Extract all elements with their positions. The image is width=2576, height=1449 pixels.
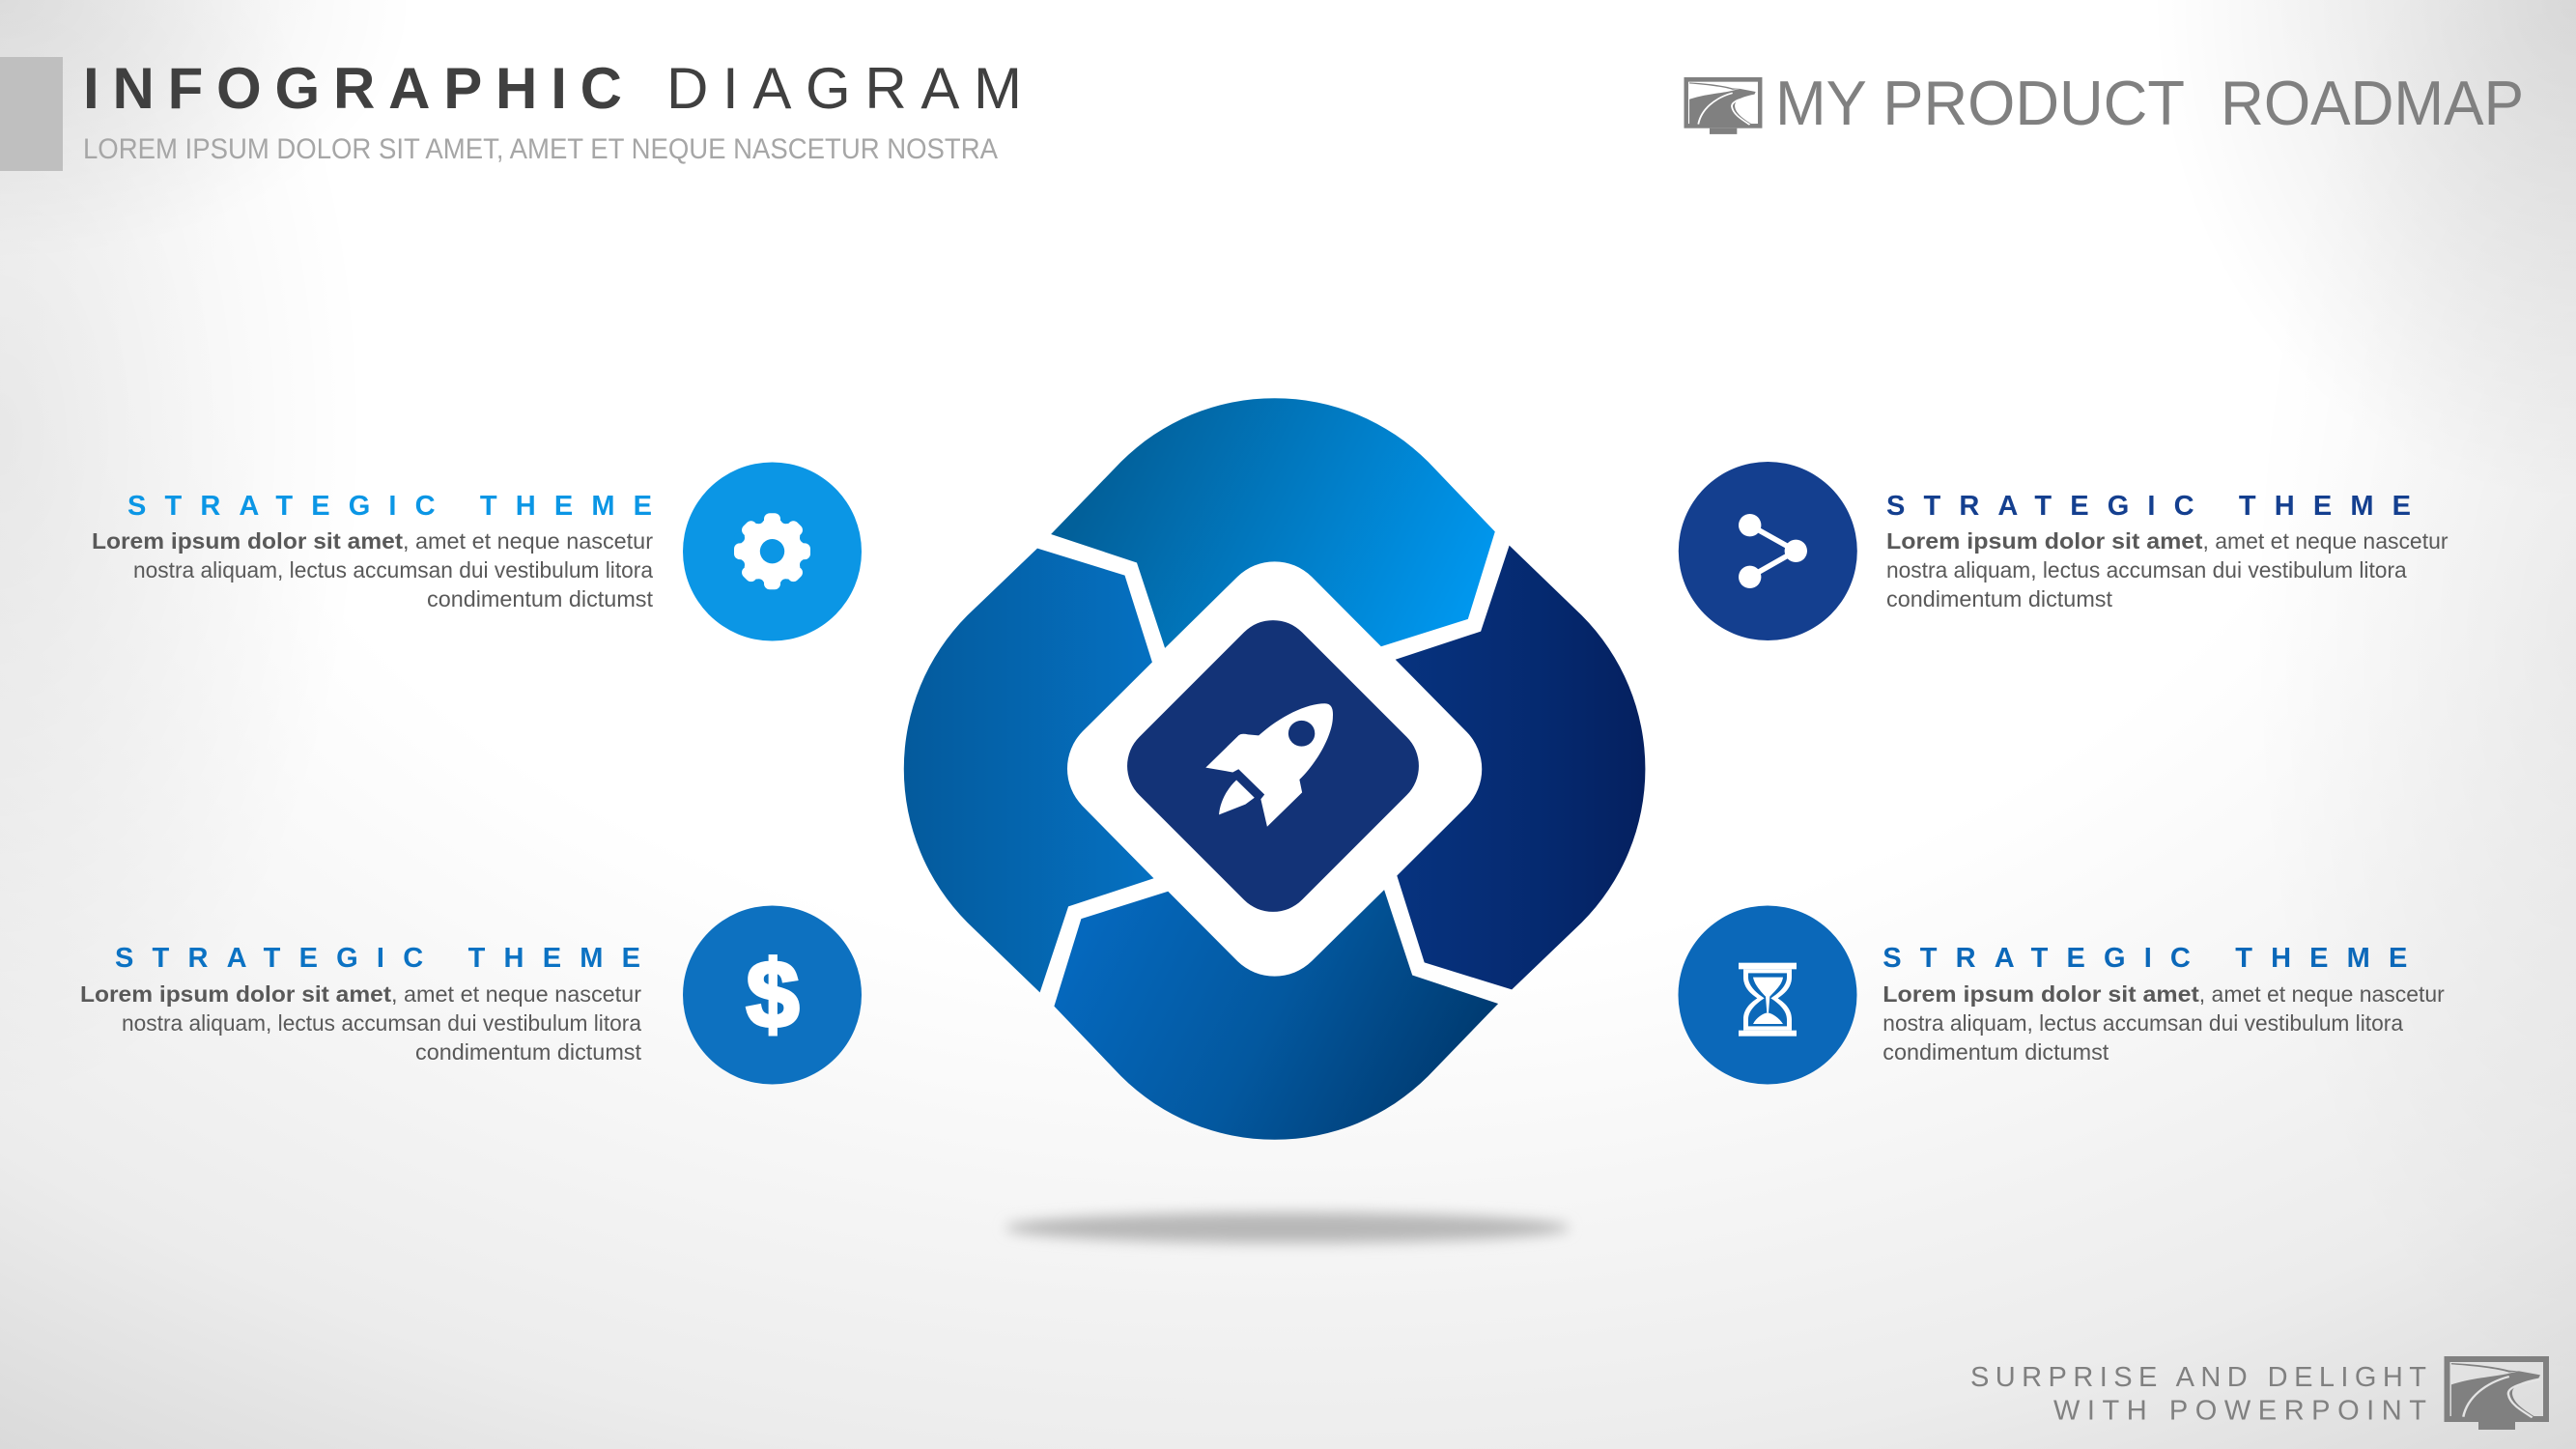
body text: , amet et neque nascetur xyxy=(2199,981,2445,1007)
heading: STRATEGIC THEME xyxy=(115,943,640,974)
body text: Lorem ipsum dolor sit amet xyxy=(92,528,403,554)
footer tagline: SURPRISE AND DELIGHT xyxy=(1970,1362,2426,1393)
segment: right xyxy=(1396,546,1645,989)
central rounded diamond xyxy=(1127,620,1419,912)
subtitle: LOREM IPSUM DOLOR SIT AMET, AMET ET NEQUE NASCETUR NOSTRA xyxy=(83,133,998,165)
footer tagline xyxy=(1970,1362,2426,1426)
heading: STRATEGIC THEME xyxy=(1886,491,2411,522)
body text: Lorem ipsum dolor sit amet xyxy=(1886,528,2203,554)
floating shadow xyxy=(1005,1212,1570,1243)
brand name xyxy=(1775,68,2524,138)
panel: theme bottom right xyxy=(1882,943,2445,1065)
brand logo: footer xyxy=(2448,1359,2546,1430)
body text: , amet et neque nascetur xyxy=(391,981,641,1007)
brand name: ROADMAP xyxy=(2221,68,2524,138)
body text: condimentum dictumst xyxy=(1882,1039,2109,1065)
body text xyxy=(1886,528,2449,611)
body text: condimentum dictumst xyxy=(415,1039,642,1065)
title xyxy=(83,56,1022,121)
icon: rocket xyxy=(1205,703,1333,827)
body text xyxy=(92,528,654,611)
heading: STRATEGIC THEME xyxy=(127,491,652,522)
body text: nostra aliquam, lectus accumsan dui vestibulum litora xyxy=(1886,557,2407,582)
body text: condimentum dictumst xyxy=(427,586,654,611)
brand logo: top xyxy=(1686,79,1760,134)
icon: dollar: $ xyxy=(747,941,799,1047)
central diagram xyxy=(904,398,1645,1140)
header accent block xyxy=(0,57,63,171)
icon: share xyxy=(1679,462,1857,640)
body text: condimentum dictumst xyxy=(1886,586,2113,611)
icon: dollar xyxy=(683,906,862,1084)
body text: Lorem ipsum dolor sit amet xyxy=(1882,981,2199,1007)
title: INFOGRAPHIC xyxy=(83,56,622,121)
icon: hourglass xyxy=(1679,906,1856,1084)
panel: theme top right xyxy=(1886,491,2449,611)
heading: STRATEGIC THEME xyxy=(1882,943,2407,974)
body text: nostra aliquam, lectus accumsan dui vestibulum litora xyxy=(1882,1010,2403,1036)
panel: theme bottom left xyxy=(80,943,642,1065)
brand name: MY PRODUCT xyxy=(1775,68,2185,138)
segment: bottom xyxy=(1054,890,1498,1140)
body text xyxy=(80,981,642,1065)
body text: , amet et neque nascetur xyxy=(403,528,653,554)
title: DIAGRAM xyxy=(666,56,1022,121)
body text: , amet et neque nascetur xyxy=(2202,528,2449,554)
segment: left xyxy=(904,549,1153,992)
segment: top xyxy=(1051,398,1495,648)
panel: theme top left xyxy=(92,491,654,611)
icon: gear xyxy=(683,462,862,641)
body text: nostra aliquam, lectus accumsan dui vestibulum litora xyxy=(122,1010,641,1036)
footer tagline: WITH POWERPOINT xyxy=(2053,1395,2426,1426)
body text xyxy=(1882,981,2445,1065)
body text: Lorem ipsum dolor sit amet xyxy=(80,981,391,1007)
body text: nostra aliquam, lectus accumsan dui vestibulum litora xyxy=(133,557,653,582)
